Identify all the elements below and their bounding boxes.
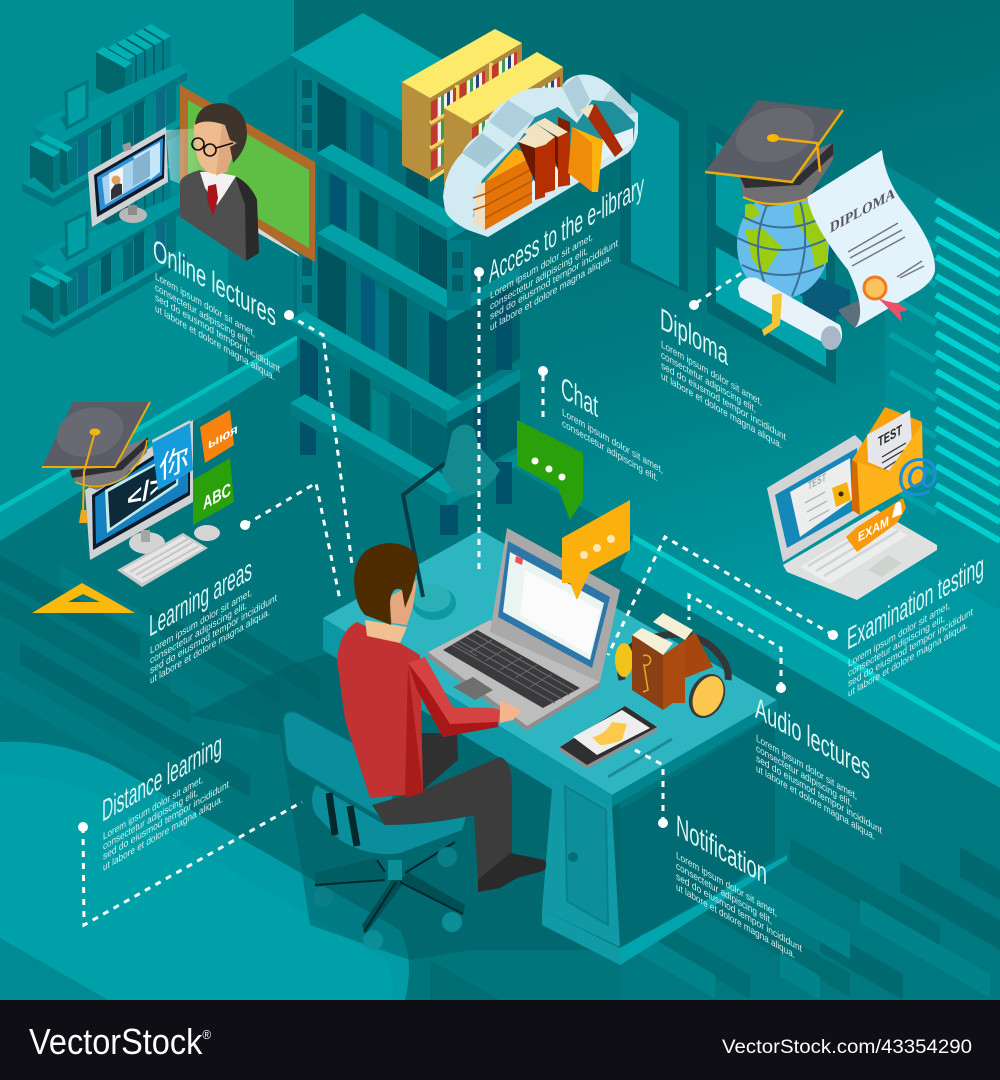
text: examination testing: Lorem ipsum dolor sit amet, — [848, 600, 950, 670]
text: learning areas: sed do eiusmod tempor incididunt — [150, 592, 277, 677]
learning areas: monitor: </> — [127, 466, 165, 516]
shelf books, row 2 — [318, 158, 449, 309]
e-library cloud — [443, 74, 638, 237]
text: diploma: ut labore et dolore magna aliqua. — [661, 370, 782, 451]
text: diploma: Diploma — [660, 301, 728, 372]
watermark bar — [0, 1000, 1000, 1080]
seated person — [337, 543, 546, 892]
webcam monitor — [88, 127, 168, 227]
shelf 4 — [290, 311, 520, 423]
text: audio lectures: ut labore et dolore magna aliqua. — [756, 763, 875, 843]
exam tag: EXAM — [858, 513, 889, 545]
text: online lectures — [153, 232, 280, 383]
text: notification: ut labore et dolore magna aliqua. — [676, 881, 795, 961]
text: notification: consectetur adipiscing elit, — [676, 860, 772, 927]
diploma sheet — [807, 150, 935, 328]
orange upright book — [568, 127, 603, 192]
headphones — [615, 634, 732, 724]
red books — [518, 103, 623, 200]
brown books — [632, 613, 713, 710]
connector: learning areas — [240, 483, 340, 600]
text: audio lectures: Audio lectures — [755, 690, 870, 787]
learning areas: keyboard and mouse — [117, 525, 220, 587]
exam tag — [846, 498, 906, 552]
connector: e-library — [474, 267, 484, 574]
shelf books, row 1 — [318, 76, 449, 230]
right side books — [447, 193, 520, 488]
text: online lectures: consectetur adipiscing elit, — [155, 282, 250, 348]
text: access to the e-library — [489, 168, 644, 334]
shelf books, row 3 — [318, 240, 449, 401]
text: examination testing: sed do eiusmod tempor incididunt — [848, 606, 973, 690]
text: access to the e-library: consectetur adipiscing elit, — [490, 245, 588, 313]
exam laptop: TEST — [808, 470, 826, 493]
text: examination testing: ut labore et dolore magna aliqua. — [848, 619, 968, 700]
diploma: globe — [737, 192, 850, 325]
language tile: Cyrillic: ыюя — [208, 421, 238, 452]
text: notification: sed do eiusmod tempor incididunt — [676, 871, 802, 955]
orange book stack — [473, 148, 532, 230]
text: access to the e-library: sed do eiusmod tempor incididunt — [490, 237, 618, 323]
desk lamp — [403, 424, 500, 620]
shelf 5 — [290, 394, 520, 506]
cloud bands — [462, 75, 638, 168]
text: learning areas — [149, 551, 277, 687]
text: diploma — [660, 301, 786, 451]
chalkboard — [180, 85, 315, 262]
connector: examination — [608, 537, 838, 655]
main laptop — [428, 528, 620, 731]
text: examination testing: consectetur adipiscing elit, — [848, 612, 945, 680]
neck — [365, 620, 407, 643]
yellow bookcases — [402, 29, 563, 200]
shelf 3 — [317, 224, 520, 321]
watermark bar: VectorStock.com/43354290 — [722, 1037, 972, 1058]
exam laptop — [767, 435, 937, 600]
shoe — [478, 853, 546, 892]
connector: chat — [538, 366, 548, 420]
arm — [408, 657, 500, 737]
diploma: cap — [705, 100, 843, 207]
central bookshelf — [290, 13, 520, 535]
learning areas: monitor — [85, 420, 193, 560]
set square — [32, 583, 135, 613]
connector: diploma — [689, 272, 743, 310]
test envelope: TEST — [878, 421, 903, 451]
learning areas: cap — [42, 400, 150, 523]
connector: notification — [635, 750, 668, 828]
watermark bar: ® — [202, 1027, 211, 1042]
language tile: ABC — [193, 458, 234, 525]
text: distance learning — [102, 727, 229, 874]
text: learning areas: Learning areas — [149, 551, 252, 643]
connector: online lectures — [284, 310, 352, 565]
text: diploma: sed do eiusmod tempor incididunt — [661, 360, 786, 443]
top shelf — [290, 13, 520, 158]
watermark bar: VectorStock — [29, 1021, 221, 1062]
trousers — [372, 757, 512, 880]
language tile: Chinese — [152, 420, 193, 490]
text: learning areas: Lorem ipsum dolor sit amet, — [150, 587, 252, 657]
torso — [337, 622, 423, 798]
office chair — [283, 712, 466, 950]
text: distance learning: sed do eiusmod tempor incididunt — [103, 779, 229, 863]
text: access to the e-library: Access to the e-library — [489, 168, 644, 289]
door panel — [620, 72, 688, 293]
connector: audio — [689, 595, 786, 693]
text: online lectures: sed do eiusmod tempor incididunt — [155, 292, 280, 375]
bookcase 2 — [444, 52, 563, 200]
text: online lectures: Online lectures — [153, 232, 276, 333]
text: chat — [561, 370, 663, 484]
text: audio lectures: Lorem ipsum dolor sit amet, — [756, 733, 857, 802]
language tile: ABC: ABC — [203, 480, 231, 515]
text: chat: consectetur adipiscing elit. — [562, 418, 658, 484]
text: audio lectures: sed do eiusmod tempor incididunt — [756, 753, 882, 837]
desk — [323, 530, 787, 965]
smartphone — [560, 706, 657, 769]
test envelope: @ — [897, 450, 939, 499]
keyboard — [443, 630, 580, 708]
floor shadow — [190, 620, 620, 960]
text: chat: Chat — [561, 370, 598, 424]
chair back — [283, 712, 393, 816]
text: audio lectures — [755, 690, 882, 843]
teacher — [180, 103, 259, 261]
text: distance learning: ut labore et dolore magna aliqua. — [103, 793, 223, 874]
window blinds — [885, 165, 1000, 610]
monitor beam — [166, 128, 210, 195]
text: diploma: consectetur adipiscing elit, — [661, 349, 756, 415]
chair base — [313, 842, 465, 950]
shelf books, row 4 — [302, 340, 447, 494]
language tile: Chinese: 你 — [159, 440, 189, 487]
orange chat bubble — [562, 500, 630, 600]
text: distance learning: Lorem ipsum dolor sit amet, — [103, 774, 203, 843]
wall shelves with books — [22, 24, 187, 338]
floor planks — [0, 555, 1000, 1000]
text: distance learning: consectetur adipiscing elit, — [103, 787, 198, 853]
window panels — [707, 122, 836, 385]
head — [354, 543, 418, 625]
text: examination testing — [847, 548, 984, 700]
text: notification — [676, 808, 802, 961]
text: audio lectures: consectetur adipiscing elit, — [756, 743, 852, 809]
text: distance learning: Distance learning — [102, 727, 222, 828]
text: chat: Lorem ipsum dolor sit amet, — [562, 407, 663, 476]
text: notification: Notification — [676, 808, 767, 892]
green chat bubble — [517, 420, 583, 520]
diploma sheet: DIPLOMA — [830, 185, 895, 237]
text: access to the e-library: ut labore et dolore magna aliqua. — [490, 252, 612, 334]
text: learning areas: consectetur adipiscing elit, — [150, 599, 247, 667]
rug — [0, 742, 409, 1000]
text: notification: Lorem ipsum dolor sit amet, — [676, 850, 777, 919]
text: learning areas: ut labore et dolore magna aliqua. — [150, 606, 270, 687]
pen — [608, 739, 672, 777]
chair seat — [312, 785, 466, 854]
text: diploma: Lorem ipsum dolor sit amet, — [661, 339, 762, 408]
hand — [500, 700, 522, 723]
connector: distance — [78, 802, 302, 925]
text: online lectures: ut labore et dolore magna aliqua. — [155, 303, 275, 383]
bookcase 1 — [402, 29, 522, 182]
text: online lectures: Lorem ipsum dolor sit amet, — [155, 271, 255, 340]
shelf front posts — [440, 240, 512, 535]
text: access to the e-library: Lorem ipsum dolor sit amet, — [490, 231, 593, 302]
language tile: Cyrillic — [200, 410, 238, 463]
left ladder post — [297, 70, 317, 455]
chair back legs — [329, 793, 357, 846]
diploma scroll — [738, 277, 842, 350]
test envelope — [852, 407, 939, 515]
shelf 2 — [317, 144, 520, 241]
